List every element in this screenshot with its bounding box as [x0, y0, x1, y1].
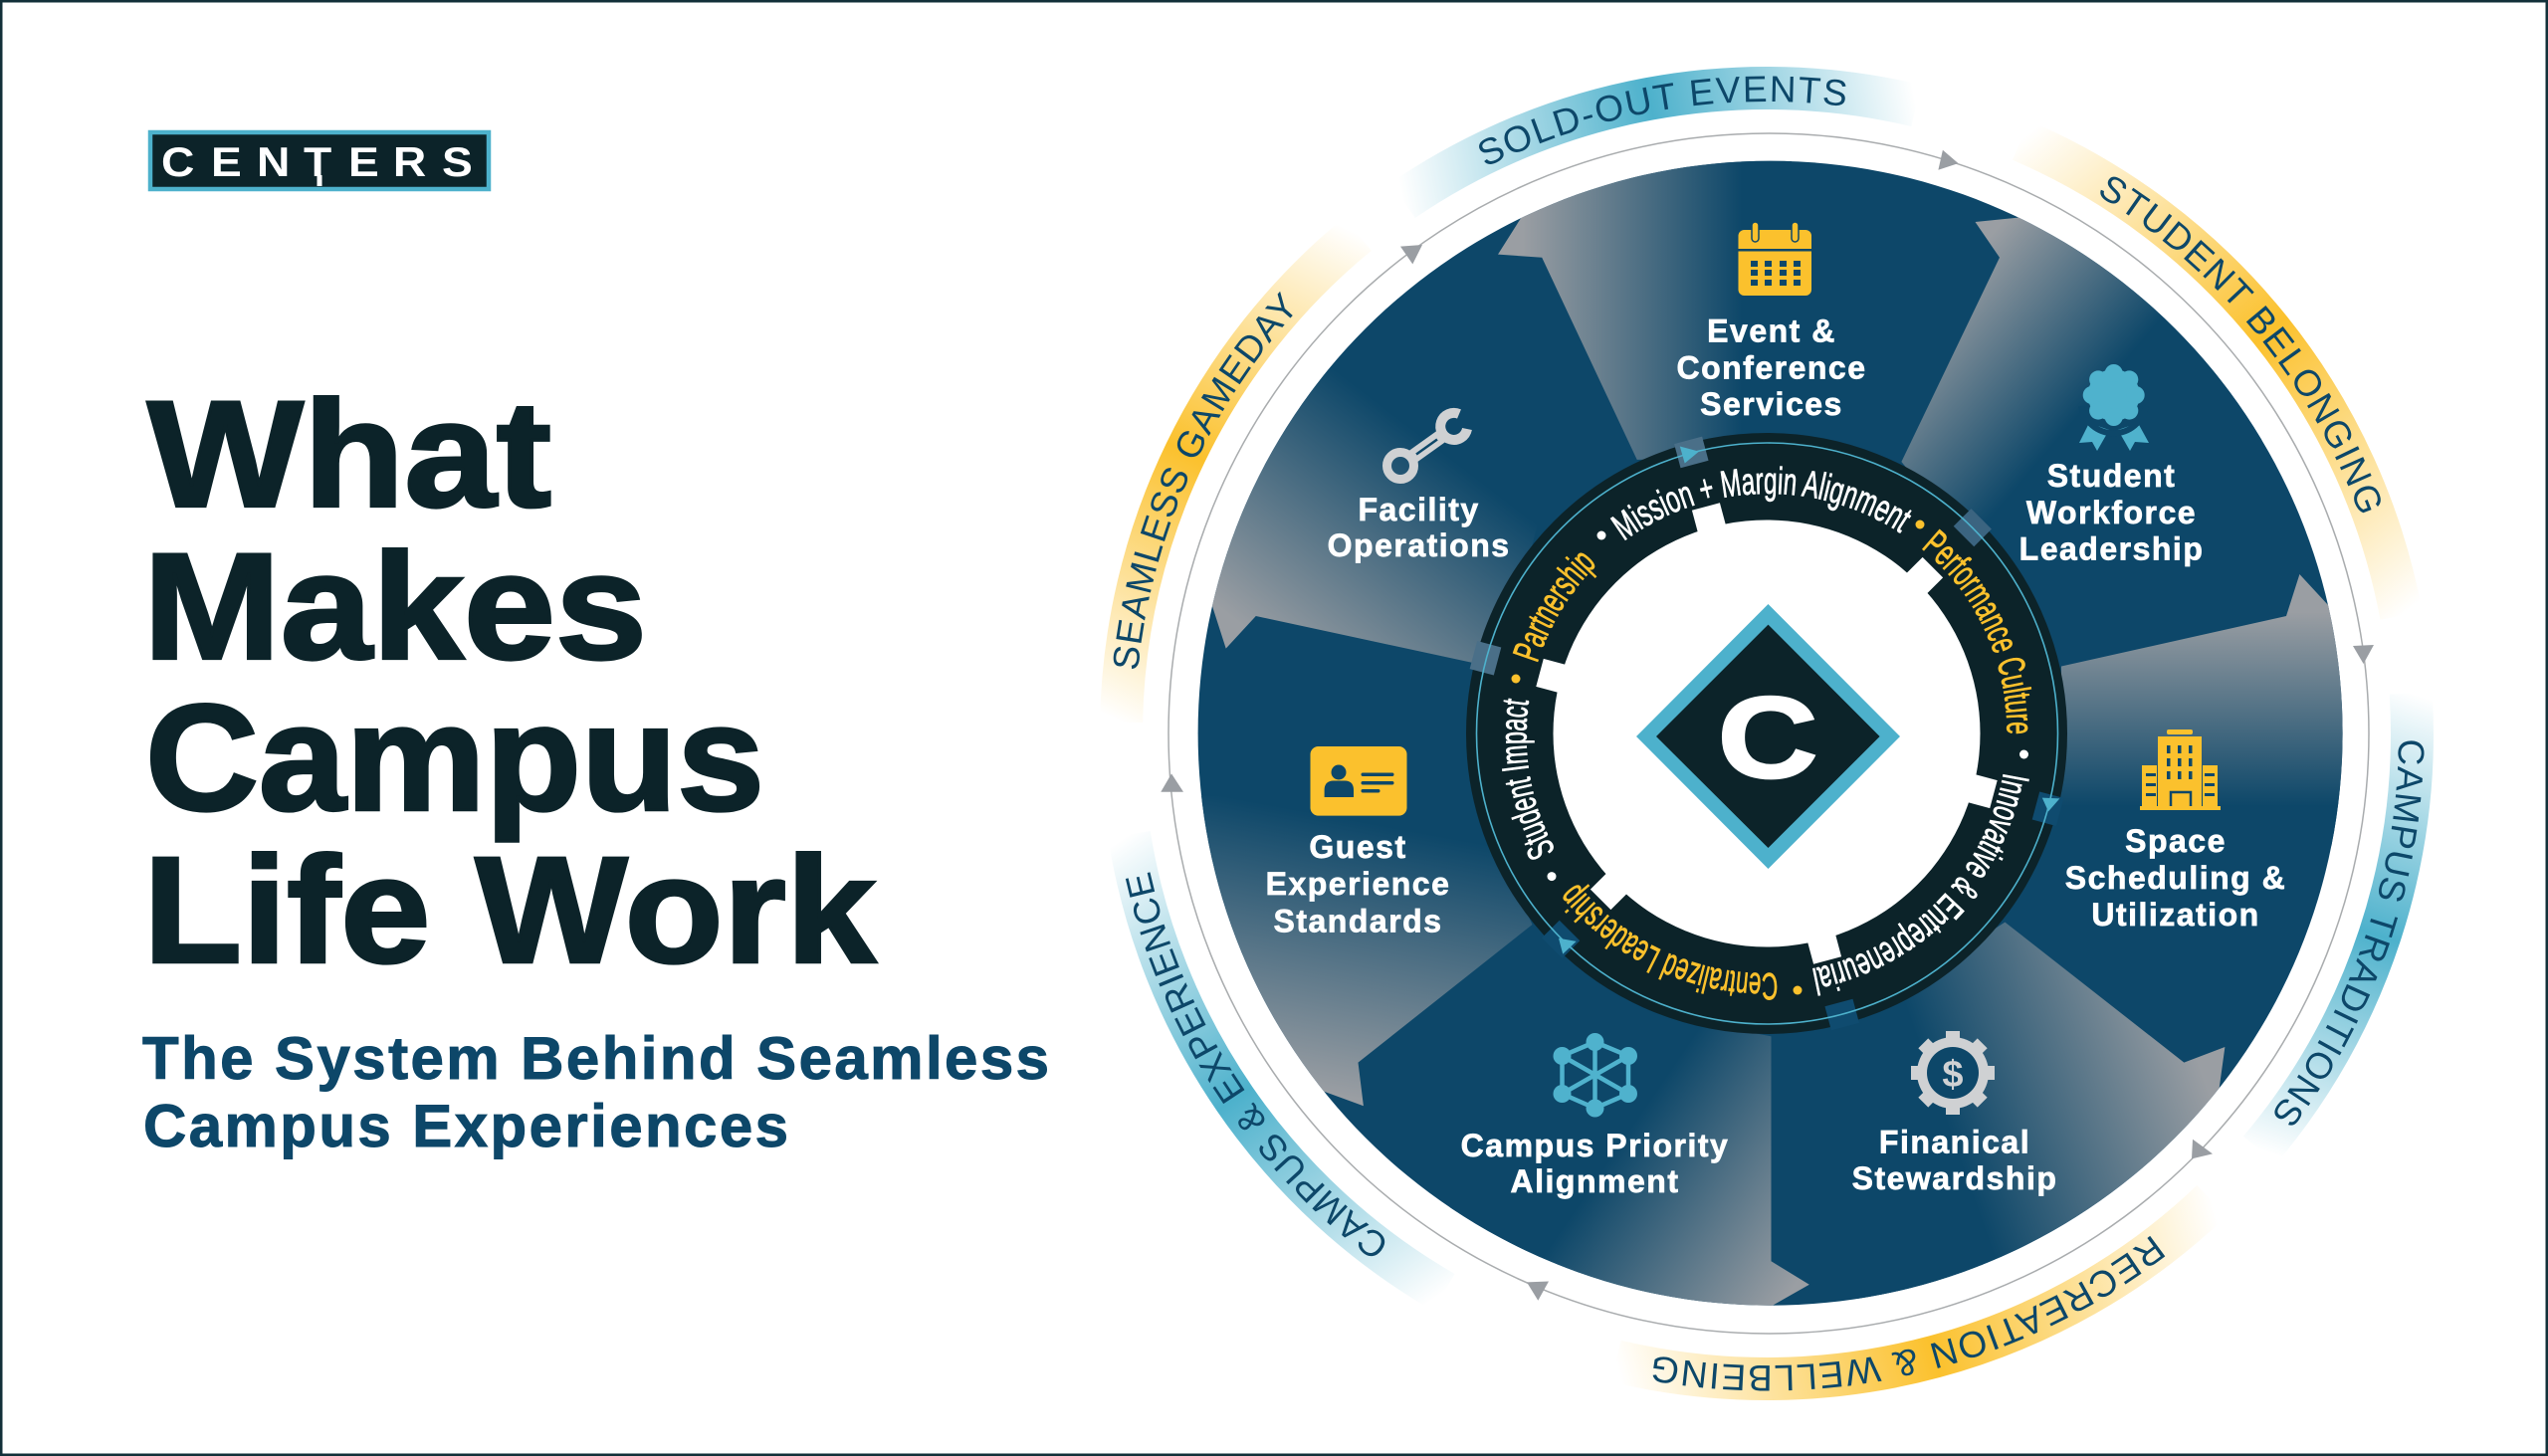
- thin cyan cycle line with arrows: [1477, 443, 2059, 1024]
- title: Life Work: [143, 826, 876, 995]
- label: Campus Priority Alignment: Campus Priority: [1461, 1128, 1729, 1163]
- outer band: Seamless Gameday: [1101, 232, 1370, 721]
- label: Student Workforce Leadership: Leadership: [2019, 531, 2204, 567]
- ring label: Partnership: Partnership: [1513, 553, 1596, 663]
- ring label: Mission + Margin Alignment: Mission + Margin Alignment: [1610, 466, 1912, 541]
- outer band: Campus & Experience: CAMPUS & EXPERIENCE: [1125, 872, 1385, 1256]
- label: Student Workforce Leadership: Workforce: [2026, 495, 2197, 530]
- label: Facility Operations: Operations: [1328, 527, 1511, 563]
- title: [143, 370, 876, 995]
- label: Event & Conference Services: Conference: [1676, 350, 1867, 386]
- label: Finanical Stewardship: Stewardship: [1852, 1160, 2057, 1196]
- icon: gear with dollar: $: [1942, 1054, 1964, 1096]
- outer band: Campus Traditions: CAMPUS TRADITIONS: [2274, 740, 2425, 1126]
- label: Guest Experience Standards: Standards: [1274, 904, 1442, 939]
- subtitle: The System Behind Seamless: [142, 1025, 1049, 1092]
- ring label: Centralized Leadership: Centralized Leadership: [1563, 884, 1778, 1000]
- label: Facility Operations: Facility: [1358, 492, 1480, 527]
- ring label: Student Impact: Student Impact: [1502, 699, 1554, 860]
- outer band: Recreation & Wellbeing: RECREATION & WELLBEING: [1652, 1236, 2166, 1391]
- icon: calendar: [1738, 222, 1811, 296]
- label: Space Scheduling & Utilization: Space: [2125, 823, 2227, 859]
- subtitle: Campus Experiences: [143, 1093, 788, 1159]
- center logo: diamond C: C: [1718, 674, 1817, 802]
- title: Makes: [143, 522, 647, 692]
- icon: wrench: [1387, 413, 1467, 480]
- cycle line with arrows: [1161, 133, 2374, 1334]
- outer band: Student Belonging: [2015, 131, 2417, 617]
- outer band: Seamless Gameday: SEAMLESS GAMEDAY: [1113, 291, 1293, 669]
- label: Event & Conference Services: Event &: [1707, 313, 1836, 349]
- icon: gear with dollar: [1911, 1031, 1995, 1115]
- label: Student Workforce Leadership: Student: [2047, 458, 2176, 494]
- outer band: Sold-Out Events: [1410, 67, 1907, 215]
- label: Finanical Stewardship: Finanical: [1879, 1125, 2030, 1160]
- ring label: Performance Culture: Performance Culture: [1922, 529, 2032, 734]
- icon: network: [1553, 1033, 1637, 1117]
- inner ring: [1466, 433, 2067, 1034]
- center logo: diamond C: [1636, 604, 1900, 869]
- icon: building: [2140, 729, 2221, 810]
- icon: ribbon seal: [2079, 364, 2149, 451]
- logo: CENTERS: CENTERS: [161, 139, 473, 186]
- label: Space Scheduling & Utilization: Utilization: [2091, 897, 2260, 933]
- ring notches: [1536, 503, 1998, 964]
- label: Space Scheduling & Utilization: Scheduling &: [2065, 860, 2286, 896]
- title: Campus: [145, 674, 764, 843]
- subtitle: [142, 1025, 1049, 1159]
- title: What: [147, 370, 551, 539]
- label: Campus Priority Alignment: Alignment: [1511, 1163, 1679, 1199]
- ring gaps: [1470, 437, 2063, 1030]
- ring separator dots: [1511, 520, 2028, 995]
- label: Guest Experience Standards: Guest: [1309, 829, 1407, 865]
- ring label: Innovative & Entrepreneurial: Innovative & Entrepreneurial: [1812, 774, 2029, 996]
- icon: ID card: [1310, 746, 1407, 816]
- label: Guest Experience Standards: Experience: [1266, 866, 1450, 902]
- outer band: Sold-Out Events: SOLD-OUT EVENTS: [1479, 76, 1845, 164]
- outer band: Student Belonging: STUDENT BELONGING: [2100, 177, 2381, 514]
- navy wheel with seven arrow sectors: [1198, 161, 2343, 1306]
- label: Event & Conference Services: Services: [1700, 386, 1843, 422]
